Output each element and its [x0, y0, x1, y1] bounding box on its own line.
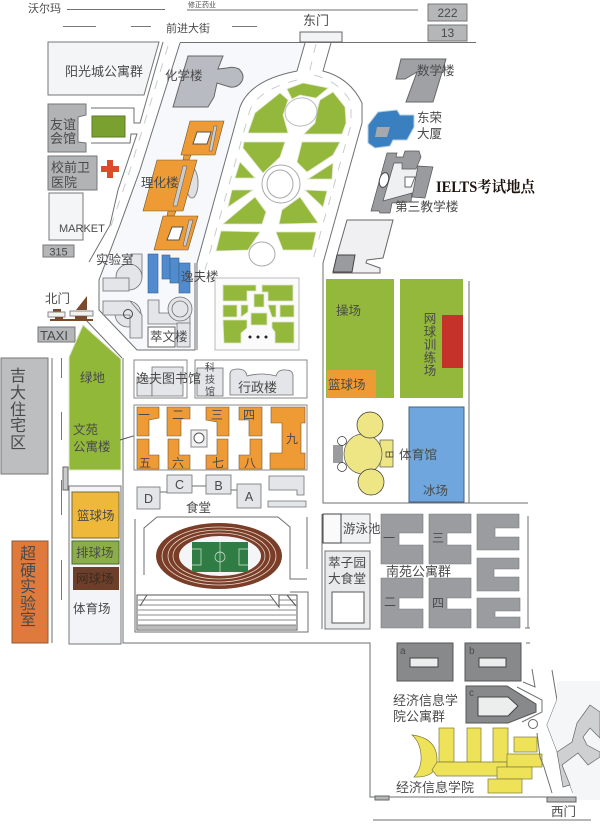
Nanyuan dormitories: 四 — [432, 596, 444, 610]
canteens A to D — [137, 475, 261, 515]
Jilin University residential area — [1, 358, 48, 474]
friendship hall: 会馆 — [50, 131, 76, 146]
label: Walmart: 沃尔玛 — [28, 2, 61, 15]
taxi stand: TAXI — [40, 328, 68, 343]
ice rink — [409, 407, 464, 502]
physics and chemistry building — [141, 121, 224, 250]
Dongrong tower — [368, 110, 443, 148]
bus stop 13: 13 — [441, 26, 454, 40]
left sports block — [63, 467, 121, 644]
leader line to dorms — [120, 427, 163, 440]
north gate: 北门 — [45, 291, 70, 306]
north gate — [45, 291, 93, 321]
orange dormitories: 四 — [243, 408, 255, 422]
Jilin University residential area: 吉 — [10, 367, 26, 385]
green space and Wenyuan dormitory: 绿地 — [80, 370, 106, 385]
tennis training ground — [400, 279, 463, 398]
label: street name: 前进大街 — [166, 21, 210, 35]
science hall and administration block: 科 — [205, 361, 215, 374]
volleyball court — [72, 541, 119, 564]
orange dormitories: 七 — [212, 456, 224, 470]
green space and Wenyuan dormitory: 公寓楼 — [73, 439, 111, 454]
chemistry building: 化学楼 — [165, 68, 203, 83]
label: small shop: 修正药业 — [188, 0, 216, 9]
white building with steps — [333, 220, 393, 273]
third teaching building — [371, 151, 459, 214]
grandstand — [137, 595, 297, 630]
Cuiziyuan canteen: 大食堂 — [328, 571, 366, 586]
science hall and administration block: 技 — [205, 373, 215, 386]
bus stop 315 — [43, 245, 74, 258]
Cuiziyuan canteen — [322, 514, 370, 629]
science hall and administration block: 行政楼 — [238, 380, 277, 395]
orange dormitories — [134, 405, 307, 470]
residential complex: 阳光城公寓群 — [65, 64, 143, 79]
tennis training ground: 练 — [424, 350, 437, 365]
economics college — [396, 728, 542, 795]
bus stop 222 — [428, 4, 467, 21]
superhard materials lab: 室 — [20, 611, 36, 629]
superhard materials lab: 超 — [20, 545, 36, 563]
orange dormitories: 九 — [286, 432, 298, 446]
bus stop 222: 222 — [437, 6, 458, 20]
roads: top streets — [63, 0, 476, 42]
orange dormitories: 六 — [172, 456, 184, 470]
green space and Wenyuan dormitory — [69, 325, 121, 470]
Dongrong tower: 东荣 — [417, 111, 443, 125]
tennis training ground: 球 — [424, 325, 437, 339]
science hall and administration block — [195, 360, 307, 398]
east gate: 东门 — [303, 13, 329, 28]
volleyball court: 排球场 — [76, 546, 114, 560]
superhard materials lab: 硬 — [20, 563, 36, 580]
Yifu library — [134, 360, 201, 398]
Yifu library: 逸夫图书馆 — [136, 371, 201, 386]
playground — [326, 279, 394, 398]
west gate: 西门 — [551, 804, 576, 819]
Nanyuan dormitories: 南苑公寓群 — [386, 564, 451, 579]
friendship hall — [48, 104, 86, 152]
left sports block: 体育场 — [73, 601, 111, 616]
orange dormitories: 八 — [244, 456, 256, 470]
Jilin University residential area: 住 — [10, 401, 26, 419]
basketball court east: 篮球场 — [328, 377, 366, 392]
market: MARKET — [59, 223, 105, 235]
southeast residential area — [547, 681, 600, 800]
tennis court: 网球场 — [76, 572, 114, 586]
tennis training ground: 网 — [424, 312, 436, 326]
green yard — [92, 116, 125, 137]
canteens A to D: A — [245, 490, 254, 504]
icon: red cross — [101, 160, 119, 178]
basketball court: 篮球场 — [77, 508, 115, 523]
economics dormitories: 经济信息学 — [393, 693, 458, 708]
chemistry building — [165, 56, 243, 107]
canteens A to D: D — [144, 492, 153, 506]
small annex — [268, 476, 306, 507]
orange dormitories: 三 — [211, 408, 223, 422]
inner garden square — [215, 278, 299, 350]
green space and Wenyuan dormitory: 文苑 — [73, 422, 99, 437]
market — [49, 193, 105, 240]
Jilin University residential area: 大 — [10, 384, 26, 402]
lab buildings — [96, 252, 142, 338]
Dongrong tower: 大厦 — [417, 127, 442, 141]
canteens A to D: 食堂 — [186, 500, 211, 515]
hospital: 校前卫 — [51, 160, 90, 175]
Cuiziyuan canteen: 萃子园 — [328, 556, 366, 570]
residential complex — [48, 42, 159, 95]
Nanyuan dormitories: 三 — [432, 531, 444, 545]
Nanyuan dormitories: 二 — [384, 595, 396, 609]
stadium — [135, 517, 308, 632]
superhard materials lab: 实 — [20, 578, 36, 596]
Yifu building — [148, 254, 219, 293]
maths building: 数学楼 — [417, 63, 455, 78]
canteens A to D: B — [214, 479, 223, 493]
economics college: 经济信息学院 — [396, 780, 474, 795]
tennis court — [73, 567, 119, 590]
third teaching building: 第三教学楼 — [395, 199, 459, 214]
Cuiwen building: 萃文楼 — [150, 329, 188, 344]
west gate — [375, 796, 576, 819]
superhard materials lab: 验 — [20, 595, 36, 613]
hospital — [48, 156, 97, 190]
ice rink: 冰场 — [423, 484, 448, 498]
Nanyuan dormitories: 一 — [383, 531, 395, 545]
orange dormitories: 五 — [139, 456, 151, 470]
basketball court — [72, 492, 119, 538]
gymnasium — [333, 412, 437, 495]
playground: 操场 — [336, 303, 361, 318]
campus ground — [99, 43, 305, 350]
economics dormitories — [393, 643, 536, 724]
economics dormitories: a — [400, 646, 406, 657]
maths building — [396, 59, 455, 102]
hospital: 医院 — [51, 175, 77, 190]
lab buildings: 实验室 — [96, 252, 134, 267]
east gate — [300, 13, 342, 42]
orange dormitories: 二 — [172, 408, 184, 422]
callout: IELTS test site: IELTS考试地点 — [436, 177, 536, 196]
economics dormitories: 院公寓群 — [393, 709, 445, 724]
superhard materials lab — [12, 541, 48, 643]
Cuiwen building — [148, 297, 192, 347]
science hall and administration block: 馆 — [205, 385, 215, 398]
swimming pool — [323, 514, 381, 543]
Nanyuan dormitories — [381, 514, 520, 628]
Yifu building: 逸夫楼 — [181, 269, 219, 284]
Jilin University residential area: 宅 — [10, 417, 26, 435]
tennis training ground: 场 — [424, 364, 436, 378]
economics dormitories: b — [469, 646, 475, 657]
friendship hall: 友谊 — [50, 117, 76, 132]
Jilin University residential area: 区 — [10, 435, 26, 452]
economics dormitories: c — [469, 688, 474, 699]
central oval garden — [216, 83, 346, 266]
gymnasium: 体育馆 — [399, 447, 437, 462]
bus stop 315: 315 — [49, 246, 68, 258]
bus stop 13 — [428, 25, 467, 41]
swimming pool: 游泳池 — [343, 522, 381, 536]
canteens A to D: C — [175, 478, 184, 492]
orange dormitories: 一 — [138, 408, 150, 422]
tennis training ground: 训 — [424, 338, 436, 352]
southeast roads — [517, 669, 573, 793]
physics and chemistry building: 理化楼 — [141, 175, 179, 190]
